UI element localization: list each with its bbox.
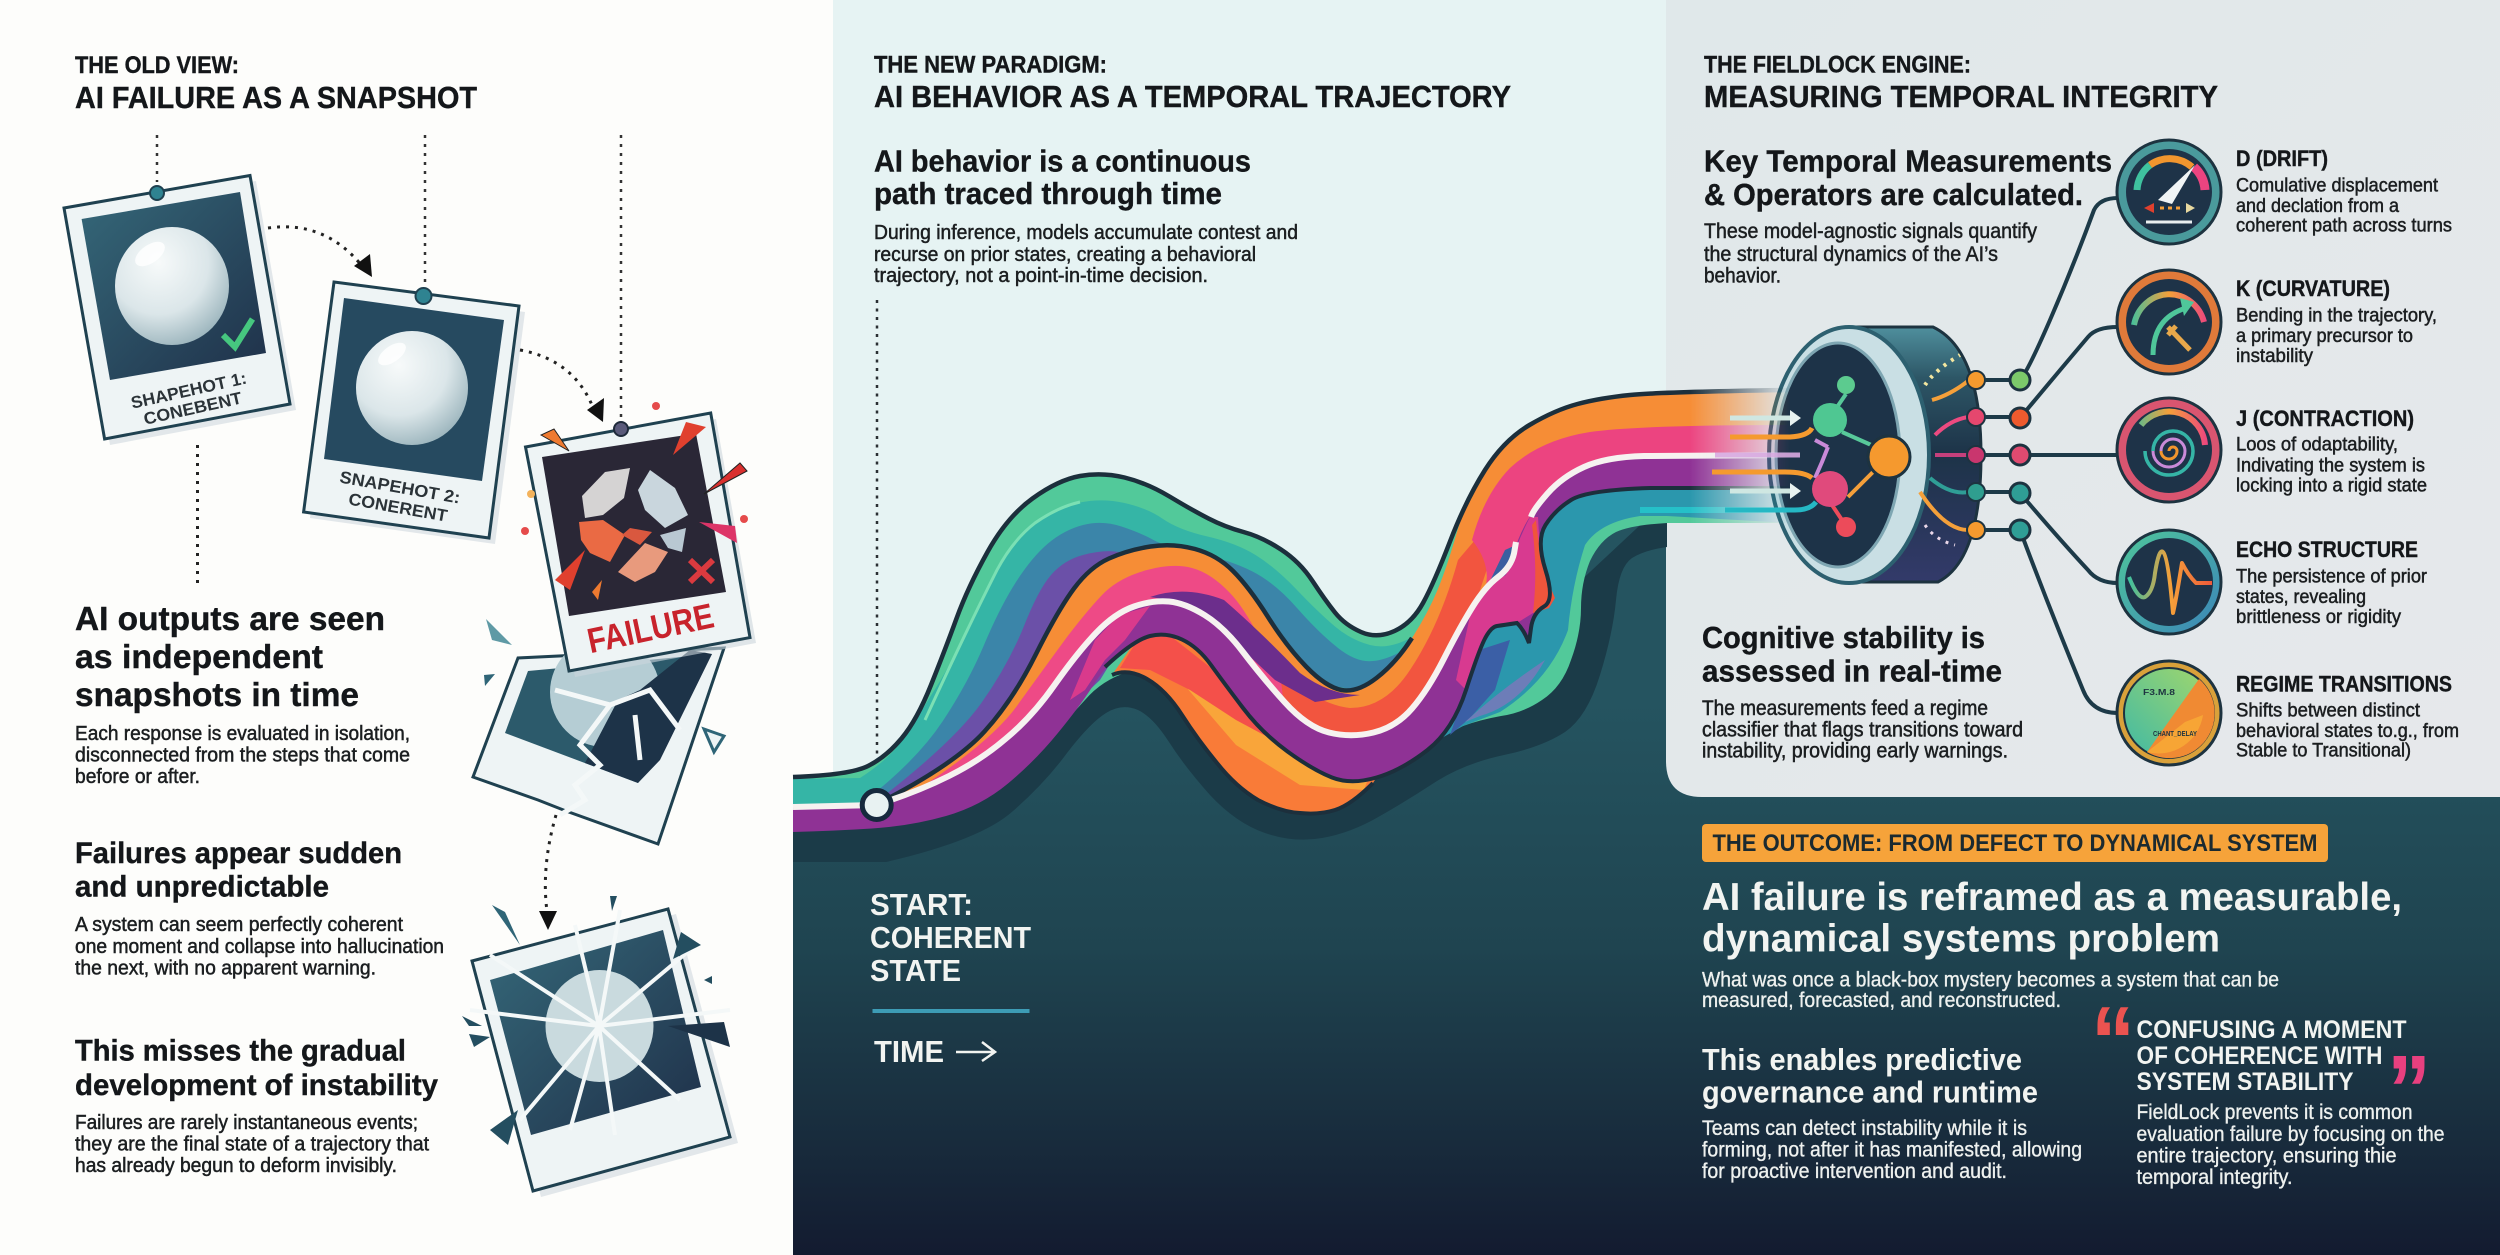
text block: sudden failures [75, 837, 444, 980]
fieldlock heading: MEASURING TEMPORAL INTEGRITY [1704, 79, 2218, 114]
engine: cylinder [1769, 327, 2030, 583]
text block: independent snapshots: Each response is evaluated in isolation, [75, 723, 410, 745]
label: echo structure: brittleness or rigidity [2236, 606, 2401, 628]
time axis rule [872, 1009, 1030, 1013]
text block: key measurements: Key Temporal Measurements [1704, 144, 2112, 178]
failure card [521, 402, 756, 677]
ribbon: teal layer [793, 500, 1412, 826]
outcome badge [1702, 824, 2328, 862]
label: regime transitions: Shifts between distinct [2236, 700, 2421, 722]
icon: shattered sphere [579, 468, 688, 582]
text block: gradual instability [75, 1034, 438, 1177]
text block: predictive governance: forming, not after it has manifested, allowing [1702, 1138, 2082, 1162]
ribbon: lower lobe [1111, 636, 1375, 816]
quote callout: entire trajectory, ensuring thie [2136, 1144, 2396, 1168]
label: contraction: locking into a rigid state [2236, 474, 2427, 496]
dark lower background [793, 510, 2500, 1255]
label: drift: coherent path across turns [2236, 214, 2452, 236]
text block: key measurements: behavior. [1704, 264, 1781, 288]
text block: sudden failures: the next, with no apparent warning. [75, 958, 376, 980]
label: regime transitions: behavioral states to.g., from [2236, 720, 2459, 742]
ribbon: coral trough [1280, 540, 1490, 745]
ribbon: magenta folds [1070, 517, 1555, 700]
new paradigm heading [874, 52, 1511, 114]
label: echo structure: ECHO STRUCTURE [2236, 537, 2418, 562]
dotted hanger lines [157, 135, 621, 588]
flying shards [462, 896, 730, 1145]
text: start coherent state: START: [870, 887, 973, 922]
label: curvature: a primary precursor to [2236, 325, 2413, 347]
new paradigm heading: AI BEHAVIOR AS A TEMPORAL TRAJECTORY [874, 79, 1511, 114]
text block: predictive governance: for proactive intervention and audit. [1702, 1160, 2007, 1183]
engine: inflow streaks and arrows [1712, 410, 1816, 510]
ribbon: violet layer [888, 551, 1119, 795]
text block: cognitive stability: Cognitive stability is [1702, 620, 1985, 655]
text block: cognitive stability [1702, 620, 2023, 762]
gauge: curvature [2117, 270, 2221, 374]
gauge: regime transitions: F3.M.8 [2143, 688, 2176, 697]
outcome section [1702, 824, 2444, 1189]
label: regime transitions [2236, 672, 2459, 762]
failure card: FAILURE [584, 596, 717, 661]
label: curvature: K (CURVATURE) [2236, 276, 2390, 301]
connector nodes [2010, 370, 2030, 540]
ribbon: white trajectory line [793, 455, 1790, 807]
text block: sudden failures: and unpredictable [75, 870, 329, 904]
text block: independent snapshots: before or after. [75, 766, 200, 788]
quote callout: CONFUSING A MOMENT [2136, 1016, 2406, 1044]
text block: continuous path: path traced through time [874, 176, 1222, 211]
text block: predictive governance: governance and runtime [1702, 1074, 2038, 1110]
label: curvature [2236, 276, 2437, 367]
label: drift: D (DRIFT) [2236, 146, 2328, 171]
quote callout: OF COHERENCE WITH [2136, 1042, 2382, 1070]
text block: gradual instability: development of instability [75, 1069, 438, 1102]
shattered snapshot card [462, 896, 738, 1197]
closing quote mark: ” [2387, 1035, 2431, 1145]
ribbon: right blue folds [1450, 640, 1545, 735]
trajectory start node [862, 790, 891, 820]
quote callout [2091, 986, 2444, 1189]
arrow: failure to shattered card [539, 815, 557, 930]
text: start coherent state: COHERENT [870, 920, 1031, 955]
text block: cognitive stability: instability, providing early warnings. [1702, 740, 2008, 762]
outcome headline: AI failure is reframed as a measurable, [1702, 876, 2402, 919]
panel: fieldlock engine text [1702, 52, 2218, 762]
text block: independent snapshots: as independent [75, 638, 323, 675]
label: drift [2236, 146, 2452, 236]
snapshot card 2: CONERENT [347, 490, 449, 526]
text block: continuous path: During inference, models accumulate contest and [874, 221, 1298, 244]
new paradigm heading: THE NEW PARADIGM: [874, 52, 1107, 78]
label: drift: and declation from a [2236, 195, 2399, 217]
label: contraction: Indivating the system is [2236, 454, 2425, 476]
arrow: card 2 to failure [520, 350, 604, 422]
fieldlock heading: THE FIELDLOCK ENGINE: [1704, 52, 1971, 78]
text block: gradual instability: has already begun to deform invisibly. [75, 1155, 397, 1177]
text block: gradual instability: they are the final state of a trajectory that [75, 1134, 429, 1156]
time arrow label [874, 1034, 995, 1069]
quote callout: evaluation failure by focusing on the [2136, 1123, 2444, 1146]
ribbon: cyan highlight [1640, 507, 1770, 513]
snapshot card 1 [64, 176, 296, 445]
text block: continuous path: recurse on prior states, creating a behavioral [874, 243, 1256, 266]
ribbon shadow [793, 500, 1667, 862]
label: contraction: Loos of odaptability, [2236, 434, 2398, 456]
panel: the new paradigm text [870, 52, 1511, 1069]
text block: key measurements: & Operators are calculated. [1704, 177, 2083, 212]
ribbon: right teal layer [1443, 490, 1774, 738]
time arrow label: TIME [874, 1034, 944, 1069]
text block: continuous path: trajectory, not a point-in-time decision. [874, 264, 1208, 287]
snapshot card 1: CONEBENT [142, 388, 244, 429]
gauge: regime transitions: CHANT_DELAY [2153, 731, 2197, 738]
text block: continuous path [874, 144, 1298, 287]
text block: predictive governance: This enables predictive [1702, 1042, 2022, 1077]
text block: gradual instability: Failures are rarely instantaneous events; [75, 1112, 418, 1134]
label: contraction [2236, 406, 2427, 496]
text block: cognitive stability: The measurements feed a regime [1702, 697, 1988, 720]
text block: key measurements [1704, 144, 2112, 288]
fieldlock heading [1704, 52, 2218, 114]
label: echo structure: The persistence of prior [2236, 566, 2427, 588]
text block: cognitive stability: classifier that flags transitions toward [1702, 718, 2023, 742]
text block: key measurements: the structural dynamics of the AI’s [1704, 243, 1998, 266]
outcome headline: What was once a black-box mystery becomes a system that can be [1702, 968, 2279, 992]
text block: cognitive stability: assessed in real-time [1702, 654, 2002, 688]
dotted start marker line [876, 300, 878, 760]
text: start coherent state [870, 887, 1031, 988]
panel: fieldlock engine background [1666, 0, 2500, 797]
ribbon: dark violet inner lobe [1150, 592, 1360, 702]
text block: independent snapshots [75, 600, 410, 788]
old view heading [75, 52, 477, 115]
label: regime transitions: REGIME TRANSITIONS [2236, 672, 2452, 696]
snapshot card 1: SHAPEHOT 1: [129, 369, 248, 413]
ribbon: blue layer [880, 522, 1398, 792]
label: echo structure [2236, 537, 2427, 628]
connector lines to gauges [2020, 198, 2118, 713]
text block: sudden failures: Failures appear sudden [75, 837, 402, 870]
old view heading: AI FAILURE AS A SNAPSHOT [75, 80, 477, 115]
text block: independent snapshots: disconnected from the steps that come [75, 744, 410, 766]
gauge: drift [2117, 140, 2221, 244]
text block: independent snapshots: snapshots in time [75, 676, 359, 713]
panel: the old view [64, 52, 756, 1197]
text: start coherent state: STATE [870, 953, 961, 988]
ribbon: dark outlines [793, 390, 1790, 800]
label: curvature: Bending in the trajectory, [2236, 304, 2437, 326]
outcome headline: measured, forecasted, and reconstructed. [1702, 989, 2061, 1012]
label: echo structure: states, revealing [2236, 586, 2366, 608]
quote callout: FieldLock prevents it is common [2136, 1101, 2412, 1124]
measurement labels [2236, 146, 2459, 762]
broken card under failure [473, 619, 724, 844]
opening quote mark: “ [2091, 986, 2135, 1096]
explosion spikes [521, 402, 748, 600]
label: curvature: instability [2236, 345, 2313, 367]
text block: key measurements: These model-agnostic signals quantify [1704, 220, 2037, 243]
panel: new paradigm background [833, 0, 1673, 800]
text block: independent snapshots: AI outputs are seen [75, 600, 385, 637]
ribbon: outer green envelope [793, 476, 1782, 779]
ribbon: pink layer left [928, 566, 1283, 782]
text block: gradual instability: This misses the gradual [75, 1034, 406, 1068]
label: drift: Comulative displacement [2236, 174, 2439, 196]
port stubs [1985, 380, 2010, 530]
ribbon: pink layer right [1472, 425, 1790, 590]
snapshot card 2: SNAPEHOT 2: [338, 468, 462, 508]
outcome headline [1702, 876, 2402, 1012]
quote callout: SYSTEM STABILITY [2136, 1068, 2354, 1096]
engine nodes [1837, 376, 1855, 394]
text block: predictive governance: Teams can detect instability while it is [1702, 1117, 2027, 1140]
arrow: card 1 to card 2 [268, 227, 372, 277]
quote callout: temporal integrity. [2136, 1166, 2292, 1189]
text block: continuous path: AI behavior is a continuous [874, 144, 1251, 178]
chart: temporal trajectory ribbon [793, 390, 1790, 832]
outcome headline: dynamical systems problem [1702, 918, 2220, 960]
label: regime transitions: Stable to Transitional) [2236, 740, 2411, 762]
text block: sudden failures: A system can seem perfectly coherent [75, 914, 403, 936]
gauge: contraction [2117, 398, 2221, 502]
gauge: echo structure [2117, 530, 2221, 634]
gauge: regime transitions [2117, 661, 2221, 765]
label: contraction: J (CONTRACTION) [2236, 406, 2414, 431]
icon: failure x mark [690, 560, 713, 582]
engine output ports [1967, 371, 1985, 539]
ribbon: purple band [793, 455, 1790, 832]
snapshot card 2 [304, 282, 525, 544]
text block: sudden failures: one moment and collapse into hallucination [75, 936, 444, 958]
outcome badge: THE OUTCOME: FROM DEFECT TO DYNAMICAL SYSTEM [1712, 830, 2318, 857]
ribbon: thin light strand [925, 502, 1080, 720]
old view heading: THE OLD VIEW: [75, 52, 239, 79]
ribbon: orange band [876, 390, 1790, 812]
text block: predictive governance [1702, 1042, 2082, 1183]
engine internal links [1815, 355, 1968, 545]
